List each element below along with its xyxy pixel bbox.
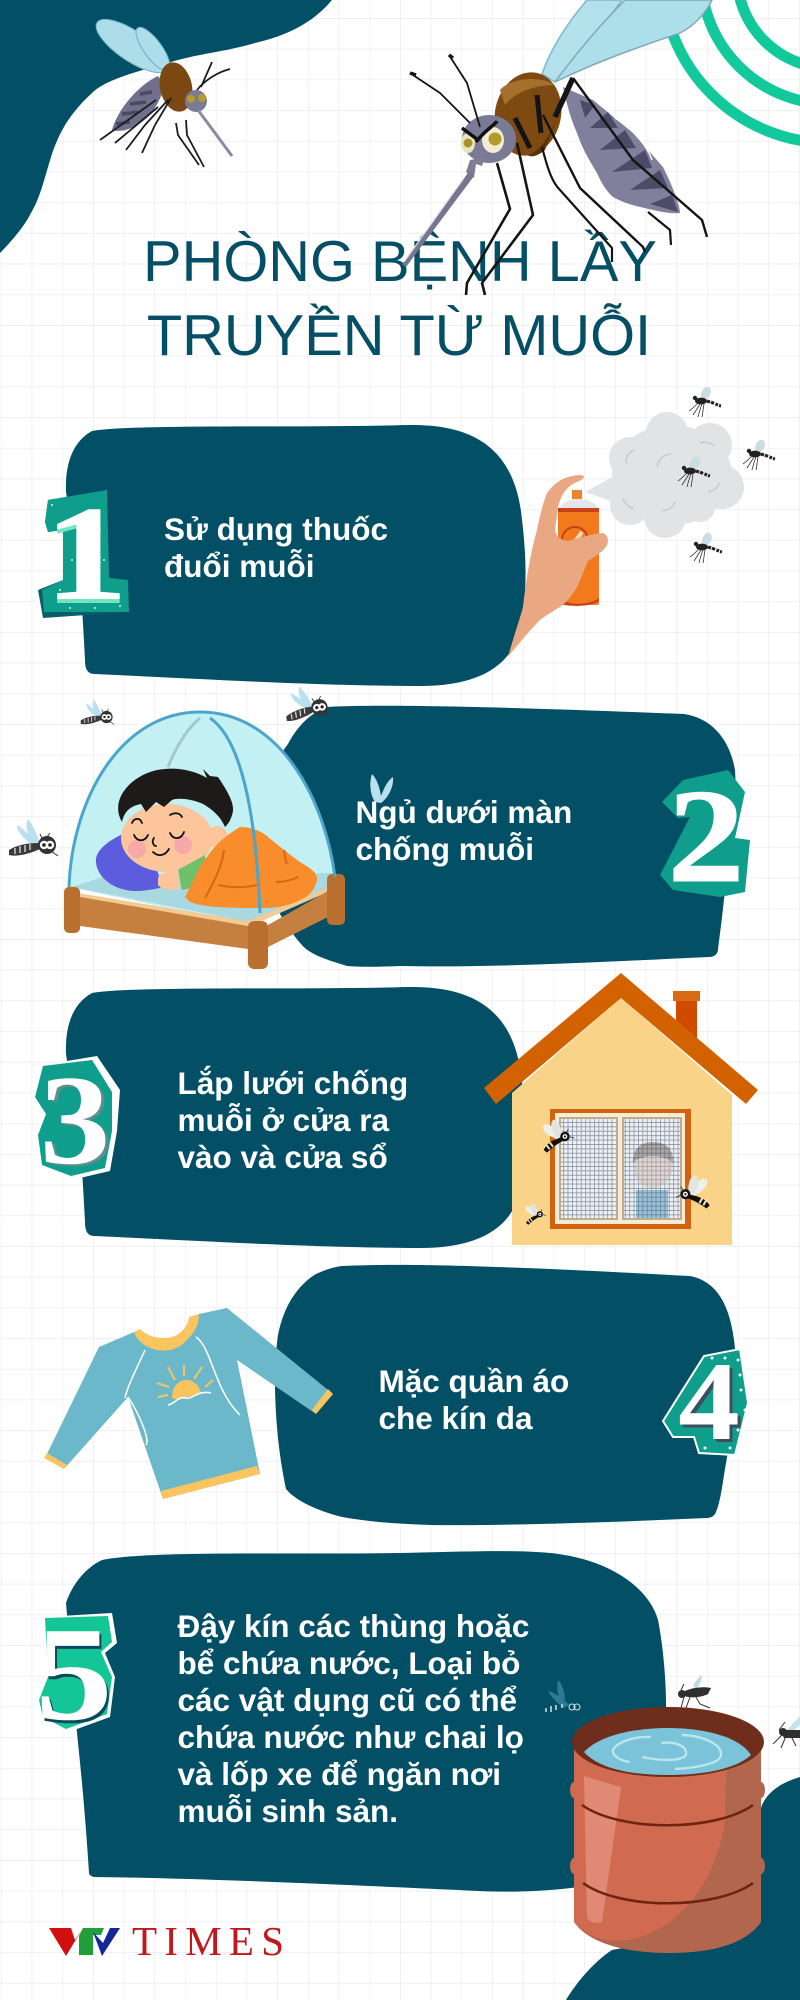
mosquitoes on house [524,1119,714,1225]
roof [484,973,758,1104]
text 1: đuổi muỗi [164,548,314,584]
text 5: muỗi sinh sản. [178,1793,398,1829]
title: PHÒNG BỆNH LẦY [143,229,657,294]
icon: water barrel [570,1707,765,1953]
decorative green arcs [662,0,800,143]
text 5: Đậy kín các thùng hoặc [178,1608,529,1644]
illustration: boy sleeping under mosquito net [64,712,345,969]
text 4: Mặc quần áo [378,1363,569,1399]
boy pillow [96,833,163,891]
net dome [69,712,335,925]
number 5 badge: 5 [35,1600,113,1749]
panel 4 [275,1265,736,1525]
logo: VTV Times: TIMES [132,1918,284,1964]
number 4 badge: 4 [678,1340,740,1464]
title [143,229,657,368]
chimney [676,1000,697,1040]
mattress [72,873,333,922]
panel 2 [258,706,736,967]
panel 5 [66,1551,666,1892]
text 1: Sử dụng thuốc [164,511,388,547]
number 3 badge: 3 [43,1052,113,1194]
boy face [121,804,213,872]
text 4 [378,1363,569,1436]
text 2 with hidden mosquito wings: Ngủ dưới màn [356,794,572,830]
number 3 badge: 3 [40,1050,110,1192]
number 2 badge: 2 [667,762,745,911]
text 5: chứa nước như chai lọ [178,1719,524,1755]
mosquitoes around spray [678,385,775,563]
spray cloud [585,412,744,538]
boy hair [118,769,233,827]
panel 1 [66,425,526,686]
text 4: che kín da [378,1400,533,1436]
text 1 [164,511,388,584]
window [550,1109,691,1229]
mosquito on dark panel [546,1680,580,1712]
number 1 badge: 1 [44,479,128,629]
text 5: và lốp xe để ngăn nơi [178,1756,501,1792]
small mosquito [89,10,232,167]
logo: VTV Times [49,1918,284,1964]
icon: long-sleeve shirt [44,1308,333,1499]
text 5 [178,1608,529,1829]
icon: hand [508,475,608,657]
number 5 badge: 5 [37,1603,115,1752]
text 2 with hidden mosquito wings [356,774,572,867]
boy sleeve and hand [178,855,207,890]
text 3: vào và cửa sổ [178,1139,388,1175]
panel 3 [66,987,526,1248]
bed frame [80,897,248,949]
text 3: Lắp lưới chống [178,1065,408,1101]
blanket [185,827,317,908]
number 4 badge: 4 [681,1343,743,1467]
background blob: top-left [0,0,332,253]
text 2 with hidden mosquito wings: chống muỗi [356,831,534,867]
number 1 badge: 1 [44,483,128,633]
text 5: các vật dụng cũ có thể [178,1682,517,1718]
text 3: muỗi ở cửa ra [178,1102,389,1138]
text 3 [178,1065,408,1175]
illustration: house with screened window [484,973,758,1245]
title: TRUYỀN TỪ MUỖI [147,303,651,368]
mosquitoes around the net [9,683,331,856]
wall [512,998,732,1245]
large mosquito [402,0,712,295]
mosquitoes by the barrel [678,1675,800,1748]
background blob: bottom-right [566,1777,800,2000]
icon: spray can [558,490,599,606]
person behind window [633,1142,673,1218]
net front arc [69,712,335,887]
text 5: bể chứa nước, Loại bỏ [178,1645,520,1681]
